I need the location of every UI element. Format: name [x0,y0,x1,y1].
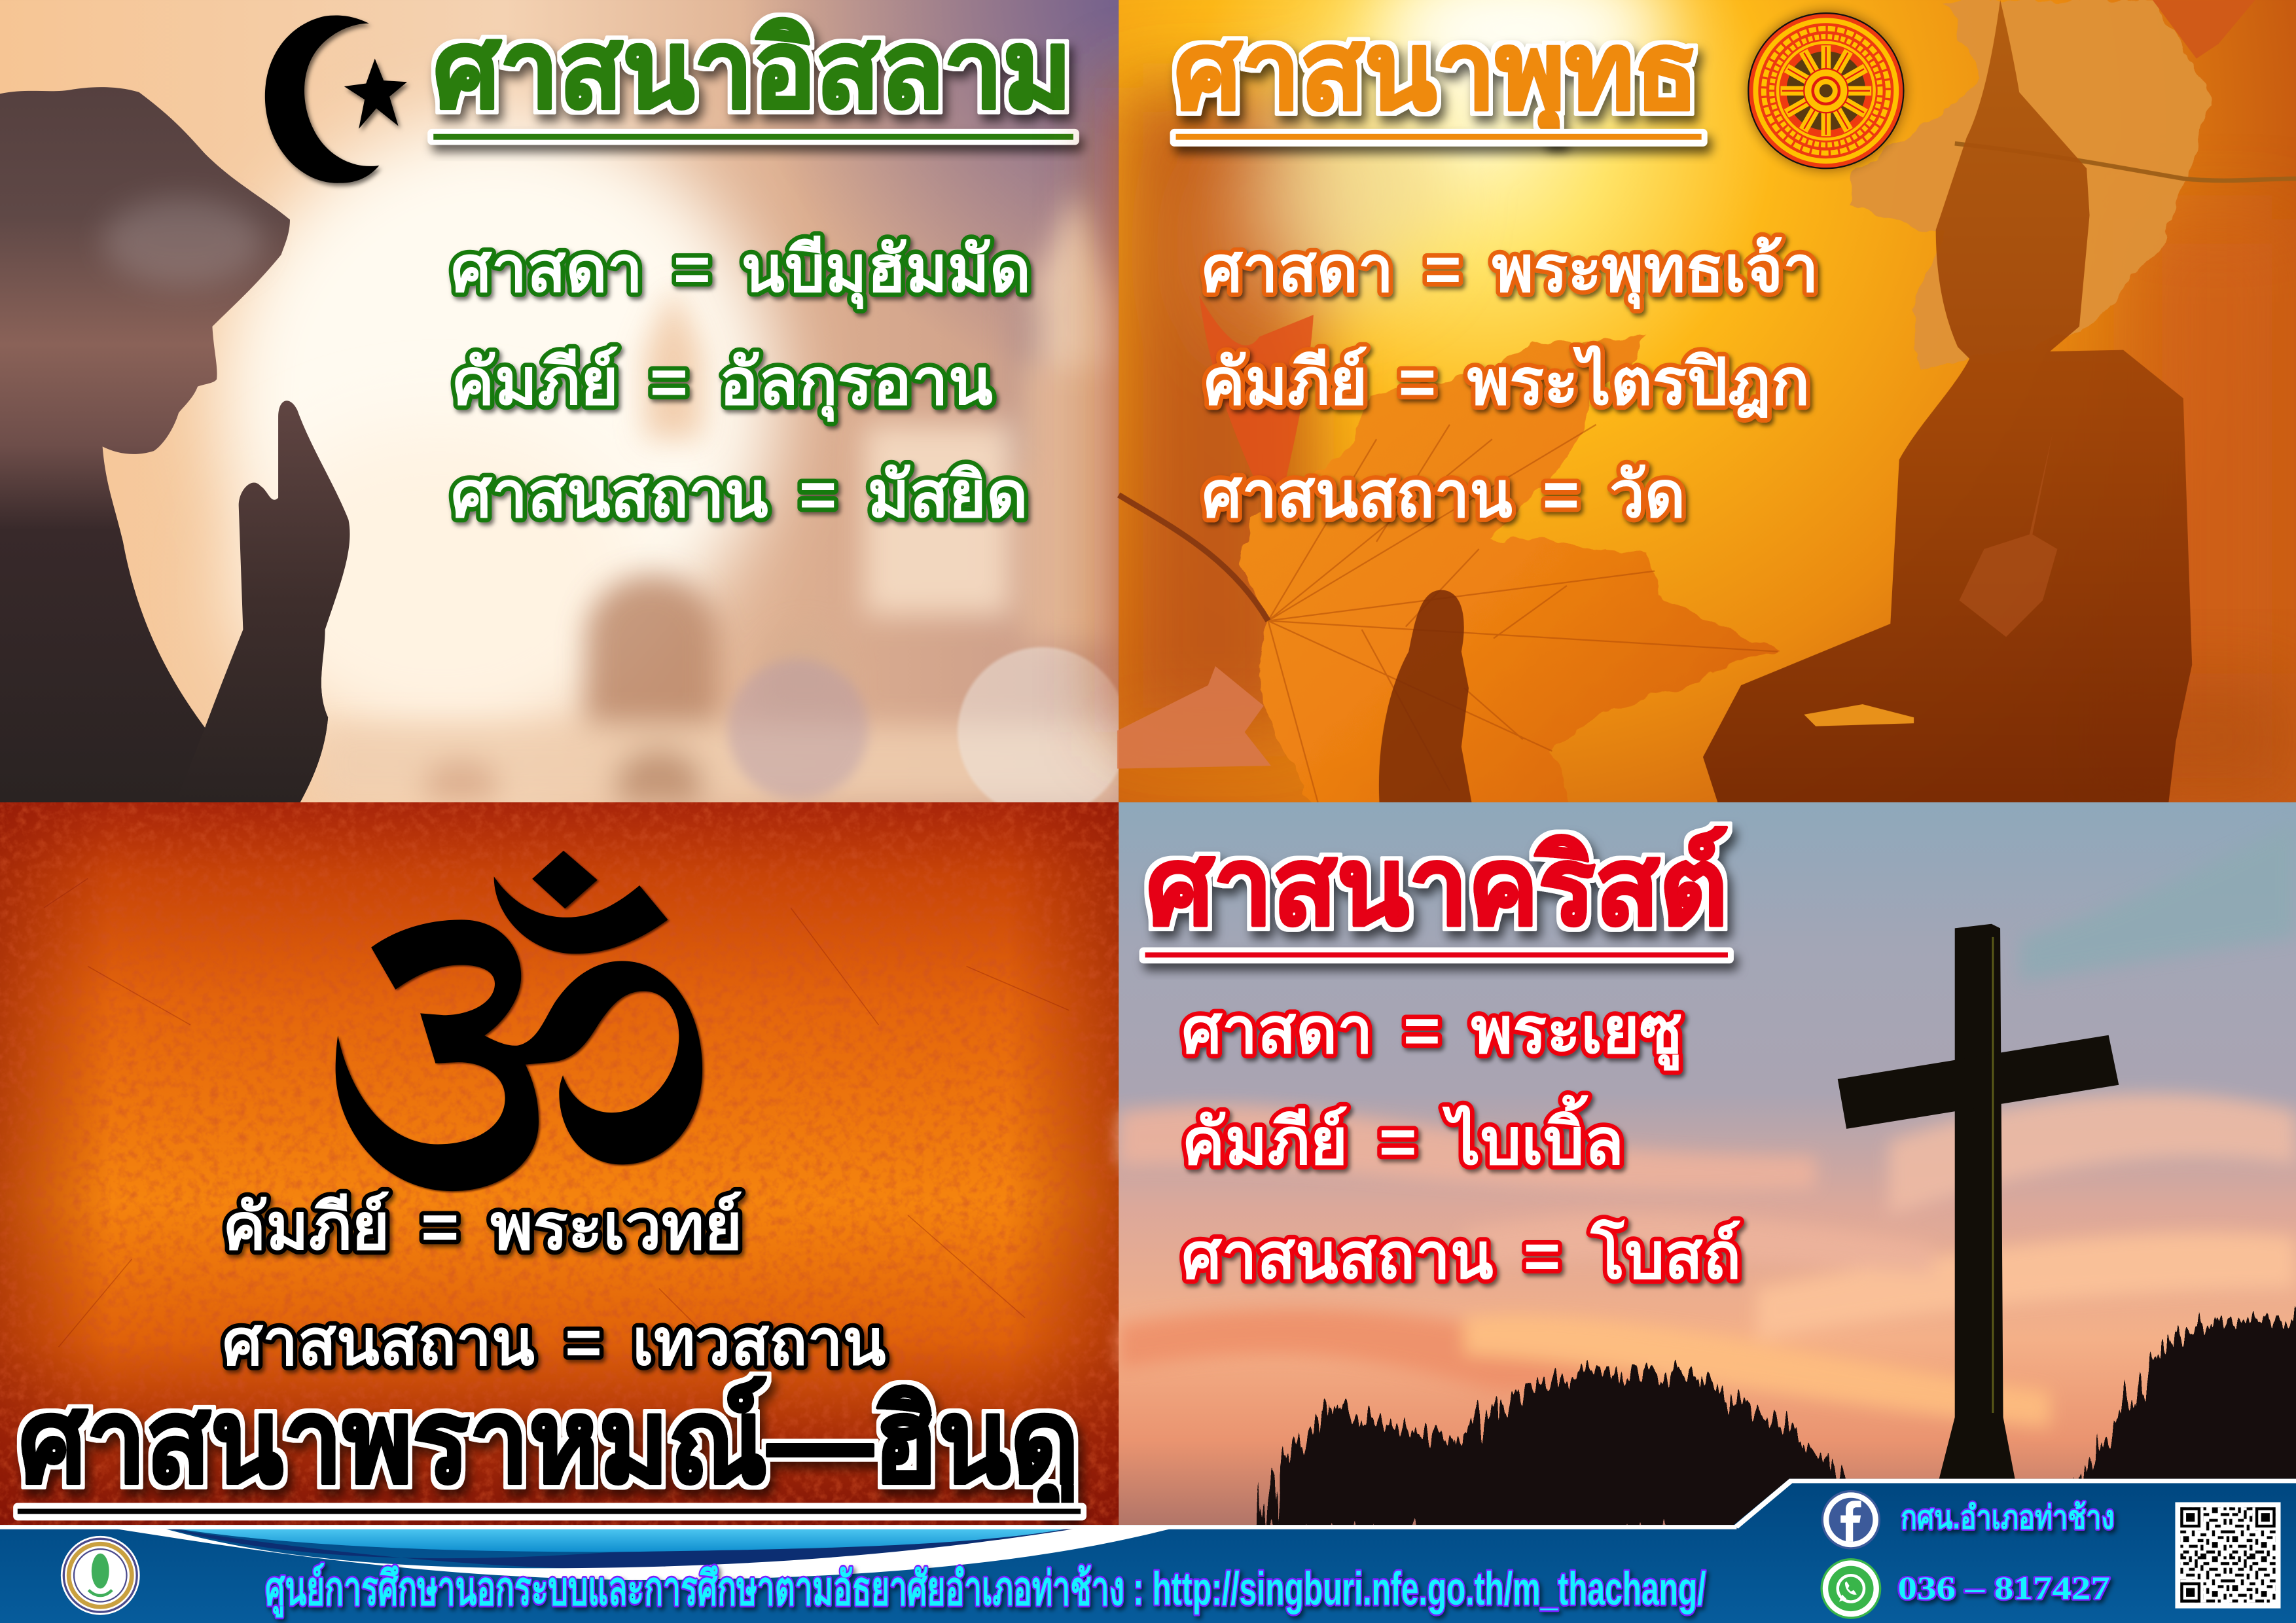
text: Islam details: ศาสนสถาน = มัสยิด [451,459,1028,531]
swoosh [0,1479,2296,1580]
underline [1170,129,1708,147]
text: Buddhism details: ศาสนสถาน = วัด [1202,459,1685,531]
title: Christianity: ศาสนาคริสต์ [1147,827,1728,948]
big maple leaf [1119,337,1778,802]
title: Hinduism: ศาสนาพราหมณ์—ฮินดู [19,1376,1079,1514]
icon: dharma wheel [1747,12,1905,170]
underline [427,129,1079,145]
grass silhouettes [1257,1318,2296,1537]
text: Christianity details: คัมภีย์ = ไบเบิ้ล [1181,1095,1624,1178]
cross [1838,924,2119,1486]
text: Buddhism details: คัมภีย์ = พระไตรปิฎก [1202,345,1810,418]
small leaf [1117,666,1271,769]
text: phone number: 036 – 817427 [1897,1570,2110,1606]
text: Hinduism details: คัมภีย์ = พระเวทย์ [223,1190,742,1262]
panel: Christianity [1119,802,2296,1537]
top-right leaf [1846,0,2296,374]
panel: Islam [0,0,1128,817]
monk silhouette [1379,590,1471,802]
Buddha silhouette [1703,0,2192,802]
underline [1139,948,1734,963]
logo seal [61,1536,140,1615]
icon: facebook [1822,1491,1880,1548]
woman silhouette [0,87,350,802]
text: Christianity details [1181,995,1741,1292]
text: Islam details: คัมภีย์ = อัลกุรอาน [451,346,993,422]
text: Christianity details: ศาสนสถาน = โบสถ์ [1181,1219,1741,1292]
icon: crescent and star [265,16,407,183]
panel: Hinduism [0,802,1119,1527]
footer [0,1479,2296,1623]
title: Buddhism: ศาสนาพุทธ [1174,11,1698,139]
icon: whatsapp [1821,1560,1880,1618]
text: Islam details: ศาสดา = นบีมุฮัมมัด [451,233,1031,310]
QR code [2175,1502,2281,1609]
text: Buddhism details [1202,233,1819,531]
text: facebook name: กศน.อำเภอท่าช้าง [1901,1500,2115,1536]
icon: Om symbol [336,851,702,1191]
text: Hinduism details: ศาสนสถาน = เทวสถาน [223,1306,886,1378]
title: Islam: ศาสนาอิสลาม [433,9,1072,130]
underline [13,1503,1086,1520]
leaf: red [1199,296,1314,498]
text: Hinduism details [223,1190,886,1378]
text: Islam details [451,233,1031,531]
text: Buddhism details: ศาสดา = พระพุทธเจ้า [1202,233,1819,310]
panel: Buddhism [1117,0,2296,802]
text: Christianity details: ศาสดา = พระเยซู [1181,995,1683,1071]
